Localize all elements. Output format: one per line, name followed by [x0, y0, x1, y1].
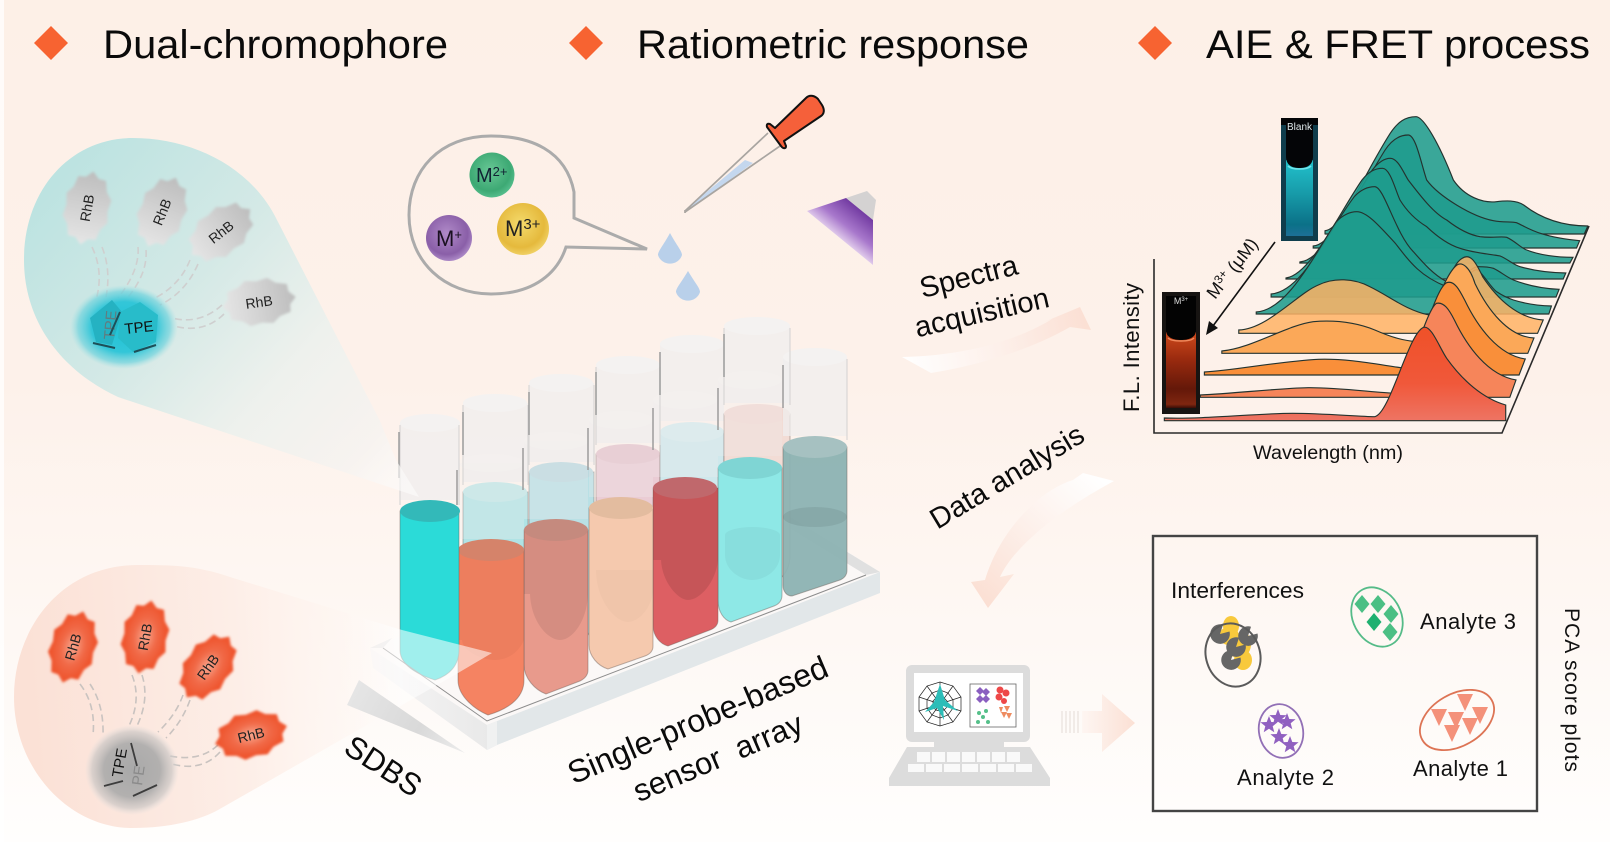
glowing TPE aggregate: TPE	[101, 310, 121, 340]
red RhB blobs	[41, 597, 292, 766]
spectra traces	[1164, 117, 1588, 421]
red RhB blobs: RhB	[194, 651, 222, 683]
arrow: data analysis	[971, 473, 1114, 608]
cuvette: blank	[1281, 118, 1318, 241]
dropper	[685, 96, 824, 213]
grey RhB blobs: RhB	[244, 292, 274, 312]
keyboard	[908, 752, 1032, 772]
ion M+	[426, 215, 472, 261]
dashed linkers	[80, 675, 220, 766]
axes	[1154, 226, 1589, 433]
red RhB blobs: RhB	[236, 724, 266, 746]
cluster: analyte 3	[1341, 578, 1516, 656]
grey TPE aggregate: TPE	[109, 747, 131, 779]
tube 3 salmon	[524, 432, 588, 694]
tray front faces	[370, 572, 880, 750]
dashed linkers	[92, 247, 224, 328]
ion M+: +	[454, 227, 462, 242]
glass side lines	[400, 328, 847, 505]
red RhB blobs: RhB	[62, 632, 84, 662]
ion M2+	[470, 152, 514, 198]
UV lamp	[807, 191, 876, 265]
chart: stacked fluorescence spectra	[1119, 117, 1589, 464]
arrow: spectra acquisition	[902, 307, 1091, 373]
glass edge highlights	[399, 334, 783, 505]
concentration arrow: (μM)	[1220, 234, 1262, 280]
grey RhB blobs: RhB	[205, 217, 237, 247]
red RhB blobs: RhB	[135, 622, 155, 652]
tube 6 cyan	[718, 371, 782, 622]
glowing TPE aggregate: TPE	[124, 318, 154, 338]
axis label: F.L. Intensity: F.L. Intensity	[1119, 283, 1144, 412]
grey TPE aggregate	[85, 725, 179, 815]
label: Data analysis: Data analysis	[925, 419, 1090, 536]
drops	[658, 233, 700, 301]
ion M3+: 3+	[523, 216, 541, 233]
cuvette: blank: Blank	[1287, 122, 1313, 133]
front tubes with coloured solutions	[399, 328, 847, 715]
laptop	[889, 665, 1050, 786]
label: Single-probe-based sensor array: sensor array	[628, 706, 809, 809]
cluster: analyte 2	[1237, 700, 1334, 790]
grey RhB blobs: RhB	[149, 196, 175, 228]
tube 5 crimson	[653, 391, 718, 646]
label: Spectra acquisition: acquisition	[912, 282, 1052, 344]
cuvette: M3+: 3+	[1181, 297, 1189, 303]
grey TPE aggregate: PE	[129, 764, 149, 787]
cluster: interferences: Interferences	[1171, 578, 1304, 603]
grey RhB blobs	[58, 168, 299, 330]
heading: Ratiometric response: Ratiometric response	[637, 23, 1029, 67]
SDBS pointer	[347, 680, 465, 753]
panel: orange zoom bubble (quenched state)	[14, 565, 492, 828]
tube 4 peach	[589, 411, 653, 669]
panel: PCA score plot	[1153, 536, 1537, 811]
panel: teal zoom bubble (AIE state)	[24, 138, 419, 497]
label: Spectra acquisition: Spectra	[916, 249, 1022, 305]
tube 2 orange	[458, 454, 524, 715]
label: PCA score plots: PCA score plots	[1560, 608, 1583, 772]
arrow: laptop to PCA plot	[1062, 694, 1135, 752]
cluster: analyte 1	[1409, 677, 1508, 781]
cluster: interferences	[1171, 578, 1304, 694]
label: Spectra acquisition	[912, 249, 1052, 344]
tray top surface	[370, 497, 880, 725]
radar chart	[919, 682, 961, 726]
tube 7 grey-teal	[783, 348, 847, 596]
label: SDBS: SDBS	[338, 728, 428, 804]
axis label: Wavelength: Wavelength (nm)	[1253, 443, 1403, 464]
ion M+: M	[436, 226, 454, 251]
cuvette: M3+: M	[1174, 296, 1181, 306]
concentration arrow	[1202, 234, 1275, 335]
grey RhB blobs: RhB	[77, 193, 97, 223]
label: Single-probe-based sensor array: Single-probe-based	[562, 649, 833, 791]
ion M3+: M	[505, 216, 523, 241]
concentration arrow: 3+	[1211, 267, 1230, 286]
ion M2+: M	[476, 165, 493, 187]
tube 1 teal	[400, 414, 460, 680]
ion M2+: 2+	[493, 164, 508, 179]
heading: AIE and FRET process: AIE & FRET process	[1206, 23, 1590, 67]
heading: Dual-chromophore: Dual-chromophore	[103, 23, 448, 67]
glowing TPE aggregate	[70, 285, 178, 369]
cluster: analyte 3: Analyte 3	[1420, 609, 1516, 634]
concentration arrow: M	[1203, 278, 1228, 302]
ion M3+	[497, 203, 549, 255]
mini score plot	[970, 684, 1016, 727]
cuvette: M3+	[1162, 292, 1200, 414]
back row tubes	[463, 317, 790, 668]
speech bubble with metal ions	[409, 136, 647, 294]
cluster: analyte 2: Analyte 2	[1237, 765, 1334, 790]
cluster: analyte 1: Analyte 1	[1413, 756, 1508, 781]
